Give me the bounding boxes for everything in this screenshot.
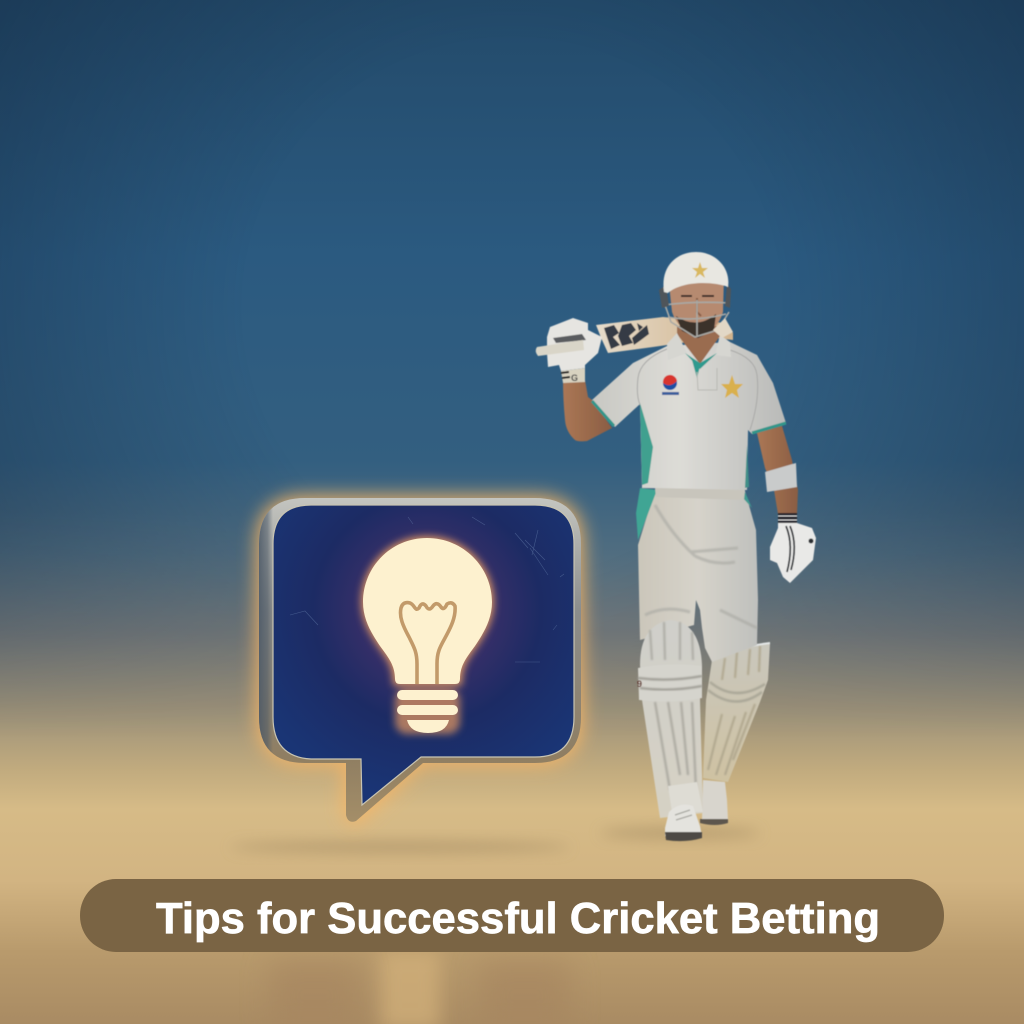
- right arm: [757, 426, 798, 514]
- front leg pad: [637, 620, 703, 818]
- jersey teal side panel: [640, 403, 653, 485]
- sponsor logo: [662, 375, 679, 395]
- batting glove lowered: [770, 513, 816, 583]
- floor shadow beneath speech bubble: [230, 841, 570, 853]
- collar: [667, 333, 687, 360]
- speech bubble with light bulb: [259, 498, 581, 822]
- front leg pad: 9: [637, 679, 642, 689]
- light bulb icon: [363, 538, 492, 734]
- banner title text: Tips for Successful Cricket Betting: [156, 894, 880, 943]
- cricket player: [536, 252, 816, 841]
- batting glove raised: G: [571, 373, 578, 383]
- placket: [697, 368, 717, 390]
- sleeve trims: [592, 401, 786, 433]
- bulb halo: [363, 538, 492, 684]
- rim left shading: [259, 498, 320, 763]
- batting glove raised: [536, 318, 602, 383]
- glove wrist strap: [561, 368, 585, 383]
- helmet dome: [663, 252, 728, 293]
- bulb base halo: [395, 688, 460, 734]
- sleeve seams: [637, 349, 758, 430]
- title banner: [80, 879, 944, 952]
- head: [659, 252, 733, 338]
- bubble metal rim: [259, 498, 581, 822]
- bat handle: [536, 340, 584, 356]
- trousers: [636, 484, 758, 662]
- waistband: [655, 488, 745, 500]
- jersey: [592, 326, 786, 500]
- bubble outer glow: [259, 498, 581, 822]
- banner pill: [80, 879, 944, 952]
- raised arm: [563, 380, 612, 441]
- bubble blue panel: [273, 505, 574, 805]
- front shoe: [665, 804, 702, 841]
- panel scratches: [290, 517, 564, 662]
- bulb base bars: [397, 690, 458, 700]
- back shoe: [700, 780, 728, 825]
- floor shadow beneath player: [600, 827, 760, 839]
- wristband: [765, 463, 797, 492]
- cricket bat: [596, 317, 733, 353]
- jersey star badge: [721, 375, 743, 398]
- neck: [677, 326, 720, 364]
- helmet star badge: [692, 262, 708, 278]
- back leg pad: [703, 643, 770, 782]
- helmet grille: [664, 300, 729, 337]
- bulb filament: [400, 603, 455, 684]
- bulb glass: [363, 538, 492, 684]
